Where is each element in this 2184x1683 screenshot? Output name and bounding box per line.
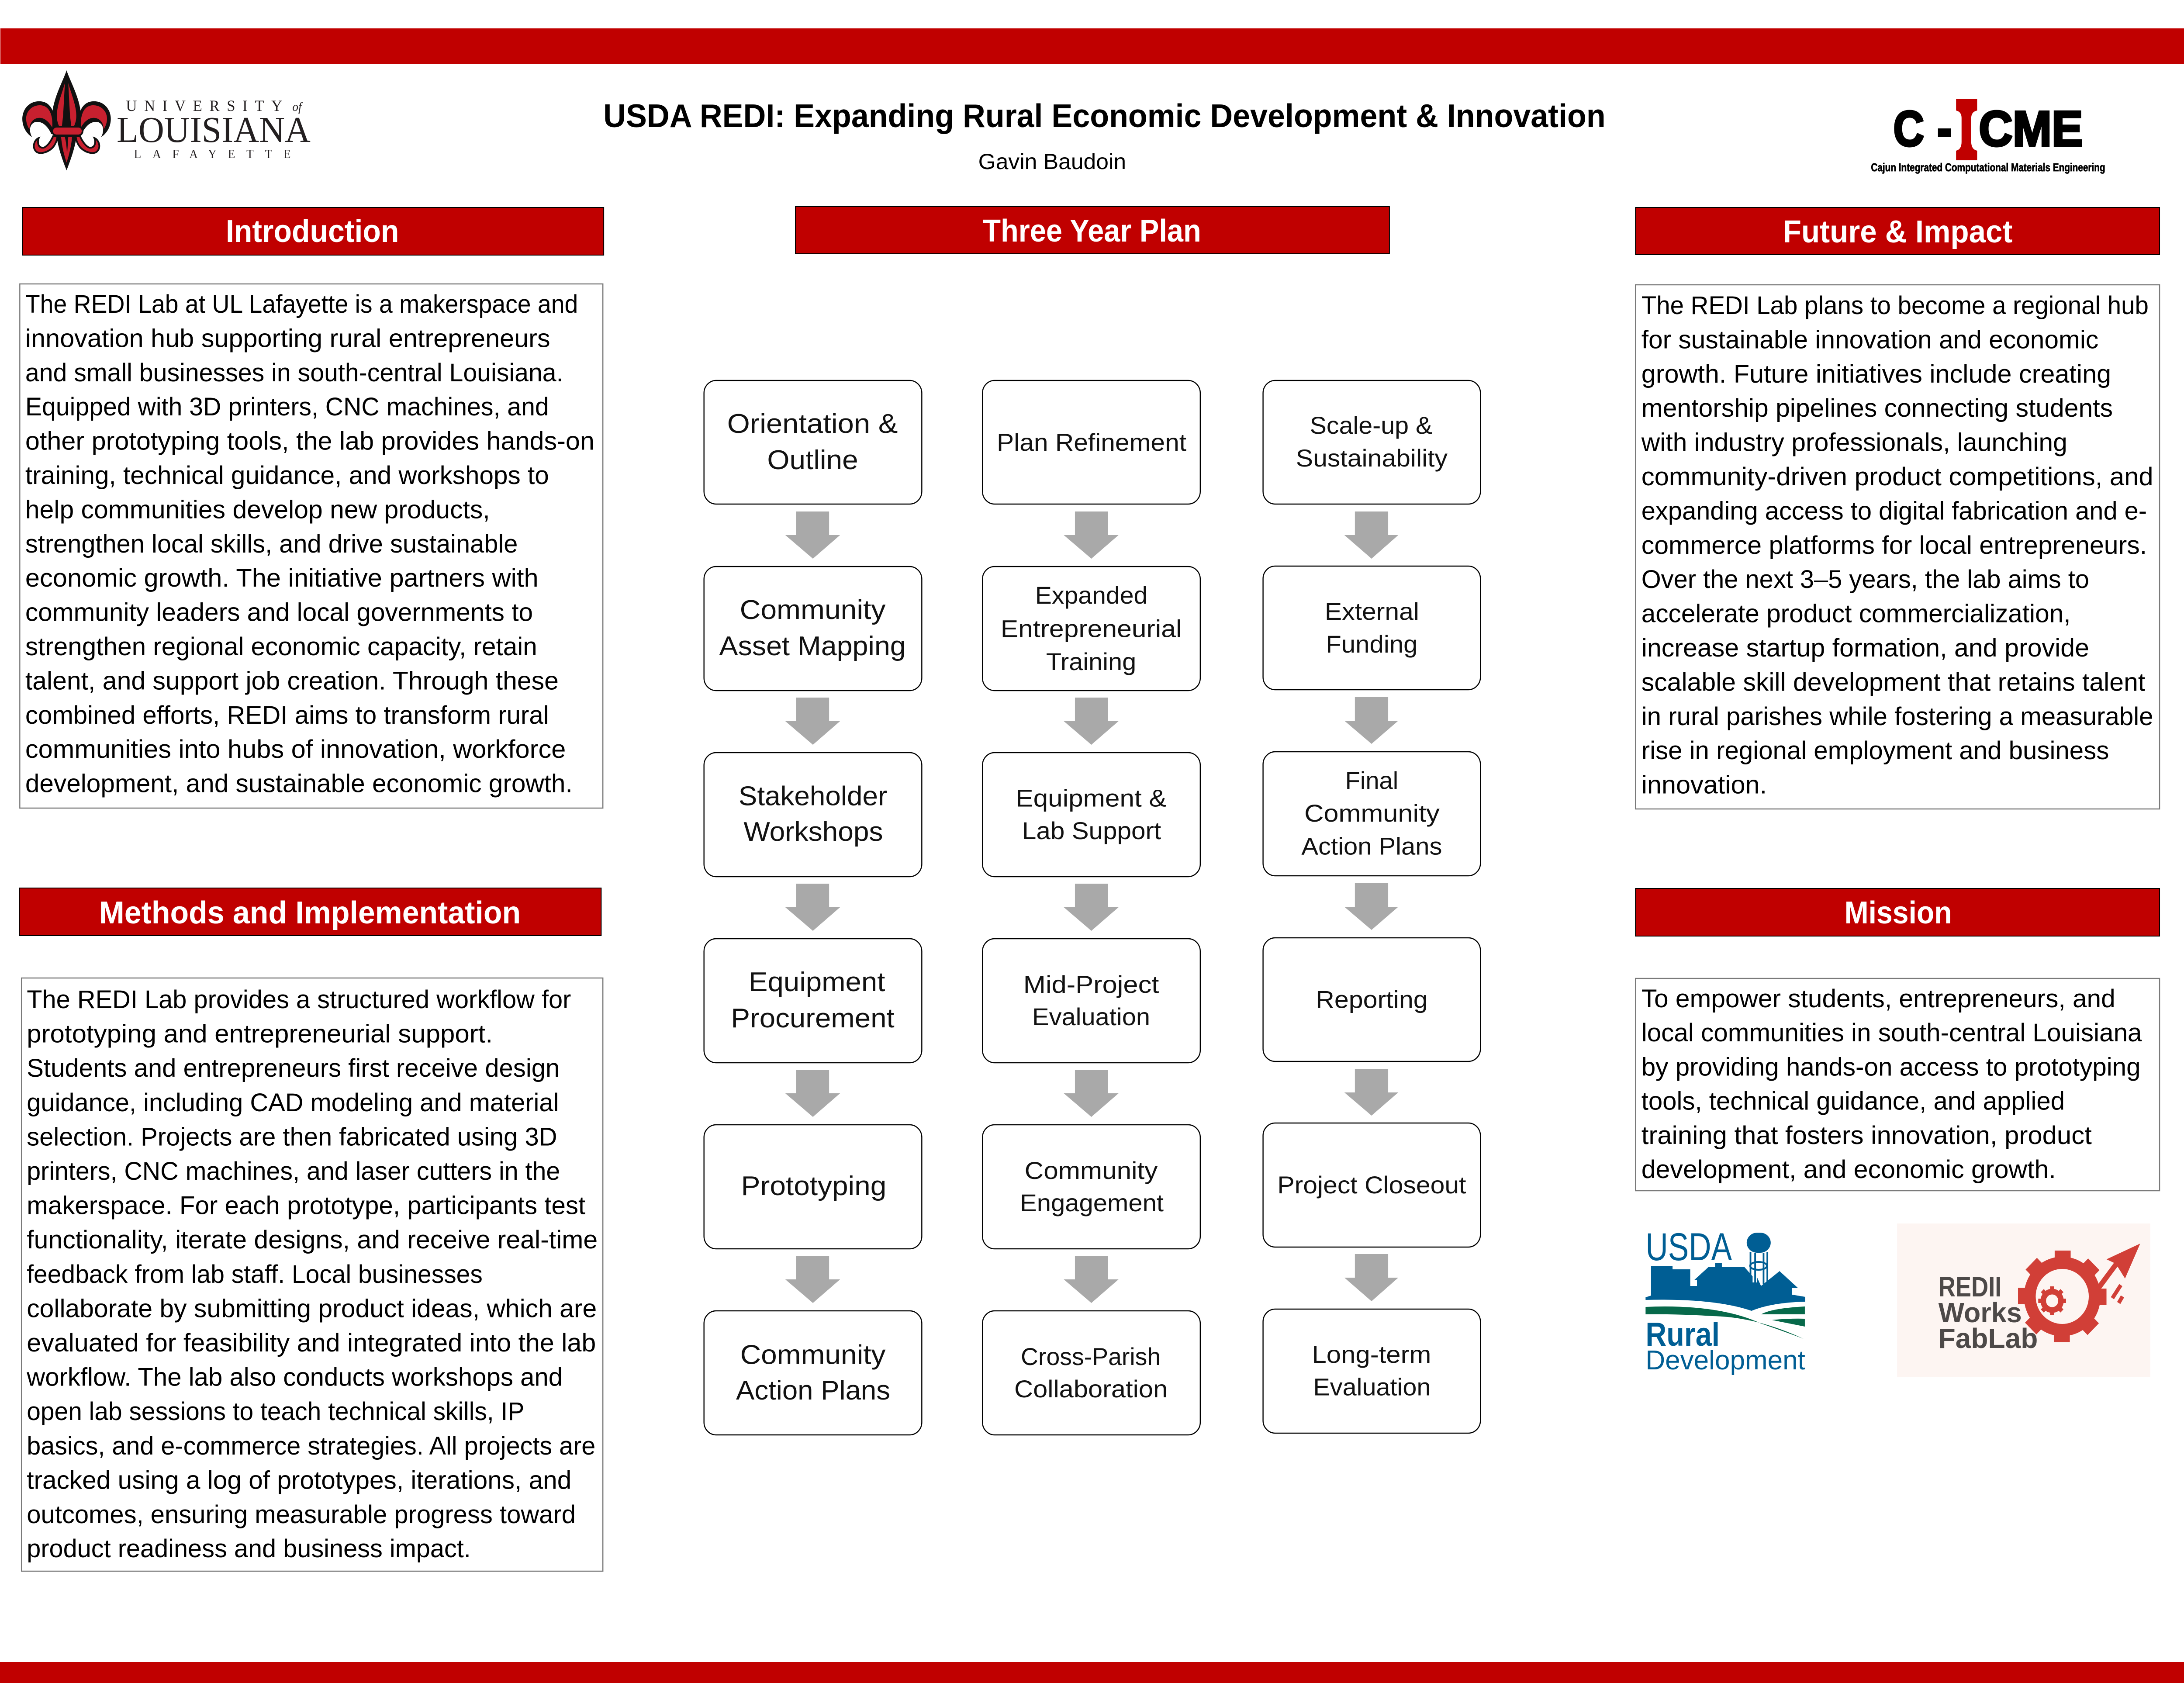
- arrow: [1344, 511, 1398, 559]
- arrow: [1064, 511, 1119, 559]
- step: Community Asset Mapping: [704, 567, 922, 691]
- methods body text: printers, CNC machines, and laser cutters in the: [27, 1157, 560, 1185]
- future text box: [1635, 285, 2160, 809]
- step: External Funding: [1263, 566, 1480, 690]
- logo background: [1897, 1223, 2150, 1377]
- step: Orientation & Outline: [704, 380, 922, 504]
- future body text: [1641, 291, 2153, 799]
- future body text: in rural parishes while fostering a measurable: [1641, 702, 2153, 731]
- future body text: community-driven product competitions, and: [1641, 463, 2153, 491]
- panel: future and impact: [1635, 207, 2160, 809]
- step: Scale-up & Sustainability: [1263, 380, 1480, 504]
- step: Expanded Entrepreneurial Training: Entrepreneurial: [1001, 615, 1182, 643]
- future body text: expanding access to digital fabrication and e-: [1641, 497, 2147, 525]
- logo text: FabLab: FabLab: [1939, 1323, 2038, 1354]
- step: Final Community Action Plans: Action Plans: [1301, 833, 1442, 860]
- methods heading: Methods and Implementation: [99, 895, 521, 930]
- introduction body text: and small businesses in south-central Louisiana.: [25, 359, 563, 387]
- step: Final Community Action Plans: Final: [1345, 767, 1398, 794]
- step: Equipment & Lab Support: Lab Support: [1022, 817, 1161, 844]
- icon: water tower: [1747, 1233, 1771, 1286]
- introduction header bar: [22, 207, 604, 255]
- panel: three year plan: [704, 207, 1480, 1435]
- step: Equipment Procurement: Procurement: [731, 1003, 895, 1033]
- step: Mid-Project Evaluation: [982, 939, 1200, 1063]
- flow column: year 2: [982, 380, 1200, 1435]
- future body text: rise in regional employment and business: [1641, 736, 2109, 765]
- arrow: [1064, 698, 1119, 745]
- arrow: [785, 698, 840, 745]
- future body text: for sustainable innovation and economic: [1641, 325, 2098, 354]
- future body text: mentorship pipelines connecting students: [1641, 394, 2113, 422]
- step: Final Community Action Plans: Community: [1304, 799, 1440, 827]
- step: Orientation & Outline: Orientation &: [727, 408, 898, 439]
- mission header bar: [1635, 888, 2160, 936]
- step: Cross-Parish Collaboration: Cross-Parish: [1021, 1343, 1161, 1370]
- step: External Funding: Funding: [1326, 630, 1418, 658]
- mission body text: To empower students, entrepreneurs, and: [1641, 985, 2115, 1013]
- step: Community Engagement: Community: [1025, 1157, 1158, 1184]
- logo subtitle: Cajun Integrated Computational Materials Engineering: [1871, 162, 2105, 174]
- step: Long-term Evaluation: Long-term: [1312, 1341, 1431, 1368]
- step: Long-term Evaluation: [1263, 1309, 1480, 1433]
- methods body text: Students and entrepreneurs first receive design: [27, 1054, 560, 1082]
- introduction body text: talent, and support job creation. Through these: [25, 667, 559, 695]
- mission body text: development, and economic growth.: [1641, 1155, 2056, 1184]
- mission text box: [1635, 978, 2160, 1191]
- methods body text: functionality, iterate designs, and receive real-time: [27, 1226, 598, 1254]
- introduction text box: [20, 284, 603, 808]
- step: Cross-Parish Collaboration: Collaboration: [1014, 1375, 1168, 1403]
- mission body text: by providing hands-on access to prototyping: [1641, 1053, 2141, 1082]
- methods body text: makerspace. For each prototype, participants test: [27, 1192, 585, 1220]
- step: Reporting: Reporting: [1316, 986, 1428, 1013]
- arrow: [1344, 883, 1398, 930]
- introduction heading: Introduction: [226, 214, 399, 249]
- mission body text: training that fosters innovation, product: [1641, 1121, 2092, 1150]
- introduction body text: training, technical guidance, and workshops to: [25, 461, 549, 490]
- step: Plan Refinement: [982, 380, 1200, 504]
- introduction body text: strengthen regional economic capacity, retain: [25, 632, 537, 661]
- step: Prototyping: Prototyping: [741, 1171, 886, 1201]
- step: Mid-Project Evaluation: Mid-Project: [1023, 971, 1159, 998]
- introduction body text: community leaders and local governments to: [25, 598, 533, 627]
- icon: rising arrow: [2098, 1244, 2140, 1303]
- step: Project Closeout: [1263, 1123, 1480, 1247]
- introduction body text: other prototyping tools, the lab provides hands-on: [25, 427, 594, 456]
- step: Community Action Plans: Community: [740, 1340, 886, 1370]
- step: Community Engagement: [982, 1125, 1200, 1249]
- icon: town silhouette: [1645, 1263, 1805, 1311]
- methods body text: prototyping and entrepreneurial support.: [27, 1020, 493, 1048]
- logo letter C: C: [1893, 101, 1924, 156]
- step: Stakeholder Workshops: [704, 753, 922, 877]
- logo: University of Louisiana at Lafayette: [22, 70, 311, 170]
- step: Prototyping: [704, 1125, 922, 1249]
- top red band: [0, 28, 2184, 64]
- step: Equipment Procurement: [704, 939, 922, 1063]
- step: Final Community Action Plans: [1263, 752, 1480, 876]
- methods body text: selection. Projects are then fabricated using 3D: [27, 1123, 557, 1151]
- logo text: Development: Development: [1645, 1345, 1805, 1375]
- logo text: Works: Works: [1939, 1297, 2022, 1328]
- future body text: innovation.: [1641, 771, 1767, 799]
- step: Reporting: [1263, 938, 1480, 1061]
- step: Mid-Project Evaluation: Evaluation: [1032, 1003, 1150, 1030]
- step: Cross-Parish Collaboration: [982, 1311, 1200, 1435]
- future body text: scalable skill development that retains talent: [1641, 668, 2145, 697]
- logo: C-ICME: [1871, 99, 2105, 174]
- step: Orientation & Outline: Outline: [767, 445, 858, 475]
- future body text: with industry professionals, launching: [1641, 429, 2067, 457]
- methods body text: basics, and e-commerce strategies. All projects are: [27, 1432, 595, 1460]
- introduction body text: strengthen local skills, and drive sustainable: [25, 530, 518, 558]
- step: Expanded Entrepreneurial Training: Expanded: [1035, 581, 1147, 609]
- logo wordmark: Lafayette: LAFAYETTE: [134, 147, 291, 161]
- arrow: [785, 511, 840, 559]
- introduction body text: Equipped with 3D printers, CNC machines, and: [25, 393, 549, 421]
- step: Community Asset Mapping: Asset Mapping: [719, 631, 906, 661]
- step: Equipment & Lab Support: Equipment &: [1016, 784, 1167, 812]
- future body text: Over the next 3–5 years, the lab aims to: [1641, 565, 2089, 594]
- methods body text: collaborate by submitting product ideas, which are: [27, 1294, 597, 1323]
- panel: introduction: [20, 207, 604, 808]
- introduction body text: [25, 290, 594, 798]
- arrow: [785, 1256, 840, 1303]
- future body text: increase startup formation, and provide: [1641, 634, 2089, 662]
- icon: green fields: [1645, 1306, 1805, 1339]
- step: Equipment Procurement: Equipment: [749, 967, 885, 997]
- methods body text: The REDI Lab provides a structured workflow for: [27, 985, 571, 1014]
- mission body text: [1641, 985, 2142, 1184]
- logo dash: [1938, 128, 1951, 137]
- methods body text: feedback from lab staff. Local businesses: [27, 1260, 483, 1289]
- title: USDA REDI: Expanding Rural Economic Development & Innovation: [603, 97, 1606, 134]
- step: Expanded Entrepreneurial Training: Training: [1046, 648, 1136, 675]
- future body text: accelerate product commercialization,: [1641, 600, 2071, 628]
- step: Community Action Plans: [704, 1311, 922, 1435]
- mission body text: local communities in south-central Louisiana: [1641, 1019, 2142, 1047]
- step: Stakeholder Workshops: Stakeholder: [739, 781, 887, 811]
- introduction body text: help communities develop new products,: [25, 495, 490, 524]
- arrow: [1344, 1254, 1398, 1301]
- step: External Funding: External: [1325, 598, 1419, 625]
- step: Community Asset Mapping: Community: [740, 594, 886, 625]
- methods body text: open lab sessions to teach technical skills, IP: [27, 1397, 524, 1426]
- flow column: year 1: [704, 380, 922, 1435]
- introduction body text: communities into hubs of innovation, workforce: [25, 735, 566, 764]
- future heading: Future & Impact: [1783, 214, 2012, 249]
- step: Stakeholder Workshops: Workshops: [743, 816, 883, 847]
- methods body text: evaluated for feasibility and integrated into the lab: [27, 1329, 596, 1357]
- future body text: commerce platforms for local entrepreneurs.: [1641, 531, 2147, 560]
- logo wordmark: of: of: [292, 100, 303, 114]
- panel: mission: [1635, 888, 2160, 1191]
- methods body text: guidance, including CAD modeling and material: [27, 1089, 559, 1117]
- logo wordmark: Louisiana: LOUISIANA: [117, 109, 311, 150]
- step: Long-term Evaluation: Evaluation: [1313, 1373, 1431, 1401]
- introduction body text: combined efforts, REDI aims to transform rural: [25, 701, 549, 729]
- methods body text: workflow. The lab also conducts workshops and: [26, 1363, 563, 1392]
- future body text: The REDI Lab plans to become a regional hub: [1641, 291, 2149, 320]
- mission heading: Mission: [1845, 895, 1952, 930]
- mission body text: tools, technical guidance, and applied: [1641, 1087, 2065, 1116]
- logo letters CME: CME: [1979, 101, 2083, 156]
- methods body text: [26, 985, 598, 1563]
- step: Community Engagement: Engagement: [1020, 1189, 1164, 1216]
- future body text: growth. Future initiatives include creating: [1641, 360, 2111, 388]
- arrow: [785, 884, 840, 931]
- icon: small gear: [2038, 1286, 2066, 1315]
- methods body text: product readiness and business impact.: [27, 1534, 471, 1563]
- introduction body text: The REDI Lab at UL Lafayette is a makerspace and: [25, 290, 578, 318]
- panel: methods and implementation: [19, 888, 603, 1571]
- introduction body text: economic growth. The initiative partners with: [25, 564, 539, 592]
- methods body text: outcomes, ensuring measurable progress toward: [27, 1500, 576, 1529]
- arrow: [1344, 697, 1398, 744]
- step: Expanded Entrepreneurial Training: [982, 567, 1200, 691]
- icon: fleur-de-lis: [22, 70, 111, 170]
- step: Scale-up & Sustainability: Scale-up &: [1310, 411, 1432, 439]
- flow column: year 3: [1263, 380, 1480, 1433]
- icon: large gear: [2018, 1251, 2107, 1342]
- three year plan heading: Three Year Plan: [983, 213, 1201, 248]
- three year plan header bar: [795, 207, 1389, 254]
- arrow: [1064, 1070, 1119, 1117]
- logo text: USDA: USDA: [1645, 1225, 1732, 1268]
- logo wordmark: University of: UNIVERSITY: [126, 97, 282, 114]
- author: Gavin Baudoin: [978, 150, 1126, 174]
- step: Equipment & Lab Support: [982, 753, 1200, 877]
- introduction body text: innovation hub supporting rural entrepreneurs: [25, 324, 550, 353]
- step: Plan Refinement: Plan Refinement: [997, 429, 1186, 456]
- logo I-beam: [1956, 99, 1977, 160]
- logo: REDII Works FabLab: [1897, 1223, 2150, 1377]
- step: Project Closeout: Project Closeout: [1277, 1171, 1466, 1199]
- arrow: [1064, 1256, 1119, 1303]
- arrow: [785, 1070, 840, 1117]
- logo text: REDII: REDII: [1939, 1272, 2001, 1303]
- methods text box: [21, 978, 603, 1571]
- arrow: [1064, 884, 1119, 931]
- future header bar: [1635, 207, 2160, 255]
- step: Community Action Plans: Action Plans: [736, 1375, 890, 1405]
- bottom red band: [0, 1662, 2184, 1683]
- logo text: Rural: Rural: [1645, 1316, 1720, 1353]
- logo: USDA Rural Development: [1645, 1225, 1805, 1375]
- methods header bar: [19, 888, 601, 936]
- arrow: [1344, 1069, 1398, 1116]
- methods body text: tracked using a log of prototypes, iterations, and: [27, 1466, 571, 1495]
- step: Scale-up & Sustainability: Sustainability: [1296, 444, 1448, 472]
- introduction body text: development, and sustainable economic growth.: [25, 770, 573, 798]
